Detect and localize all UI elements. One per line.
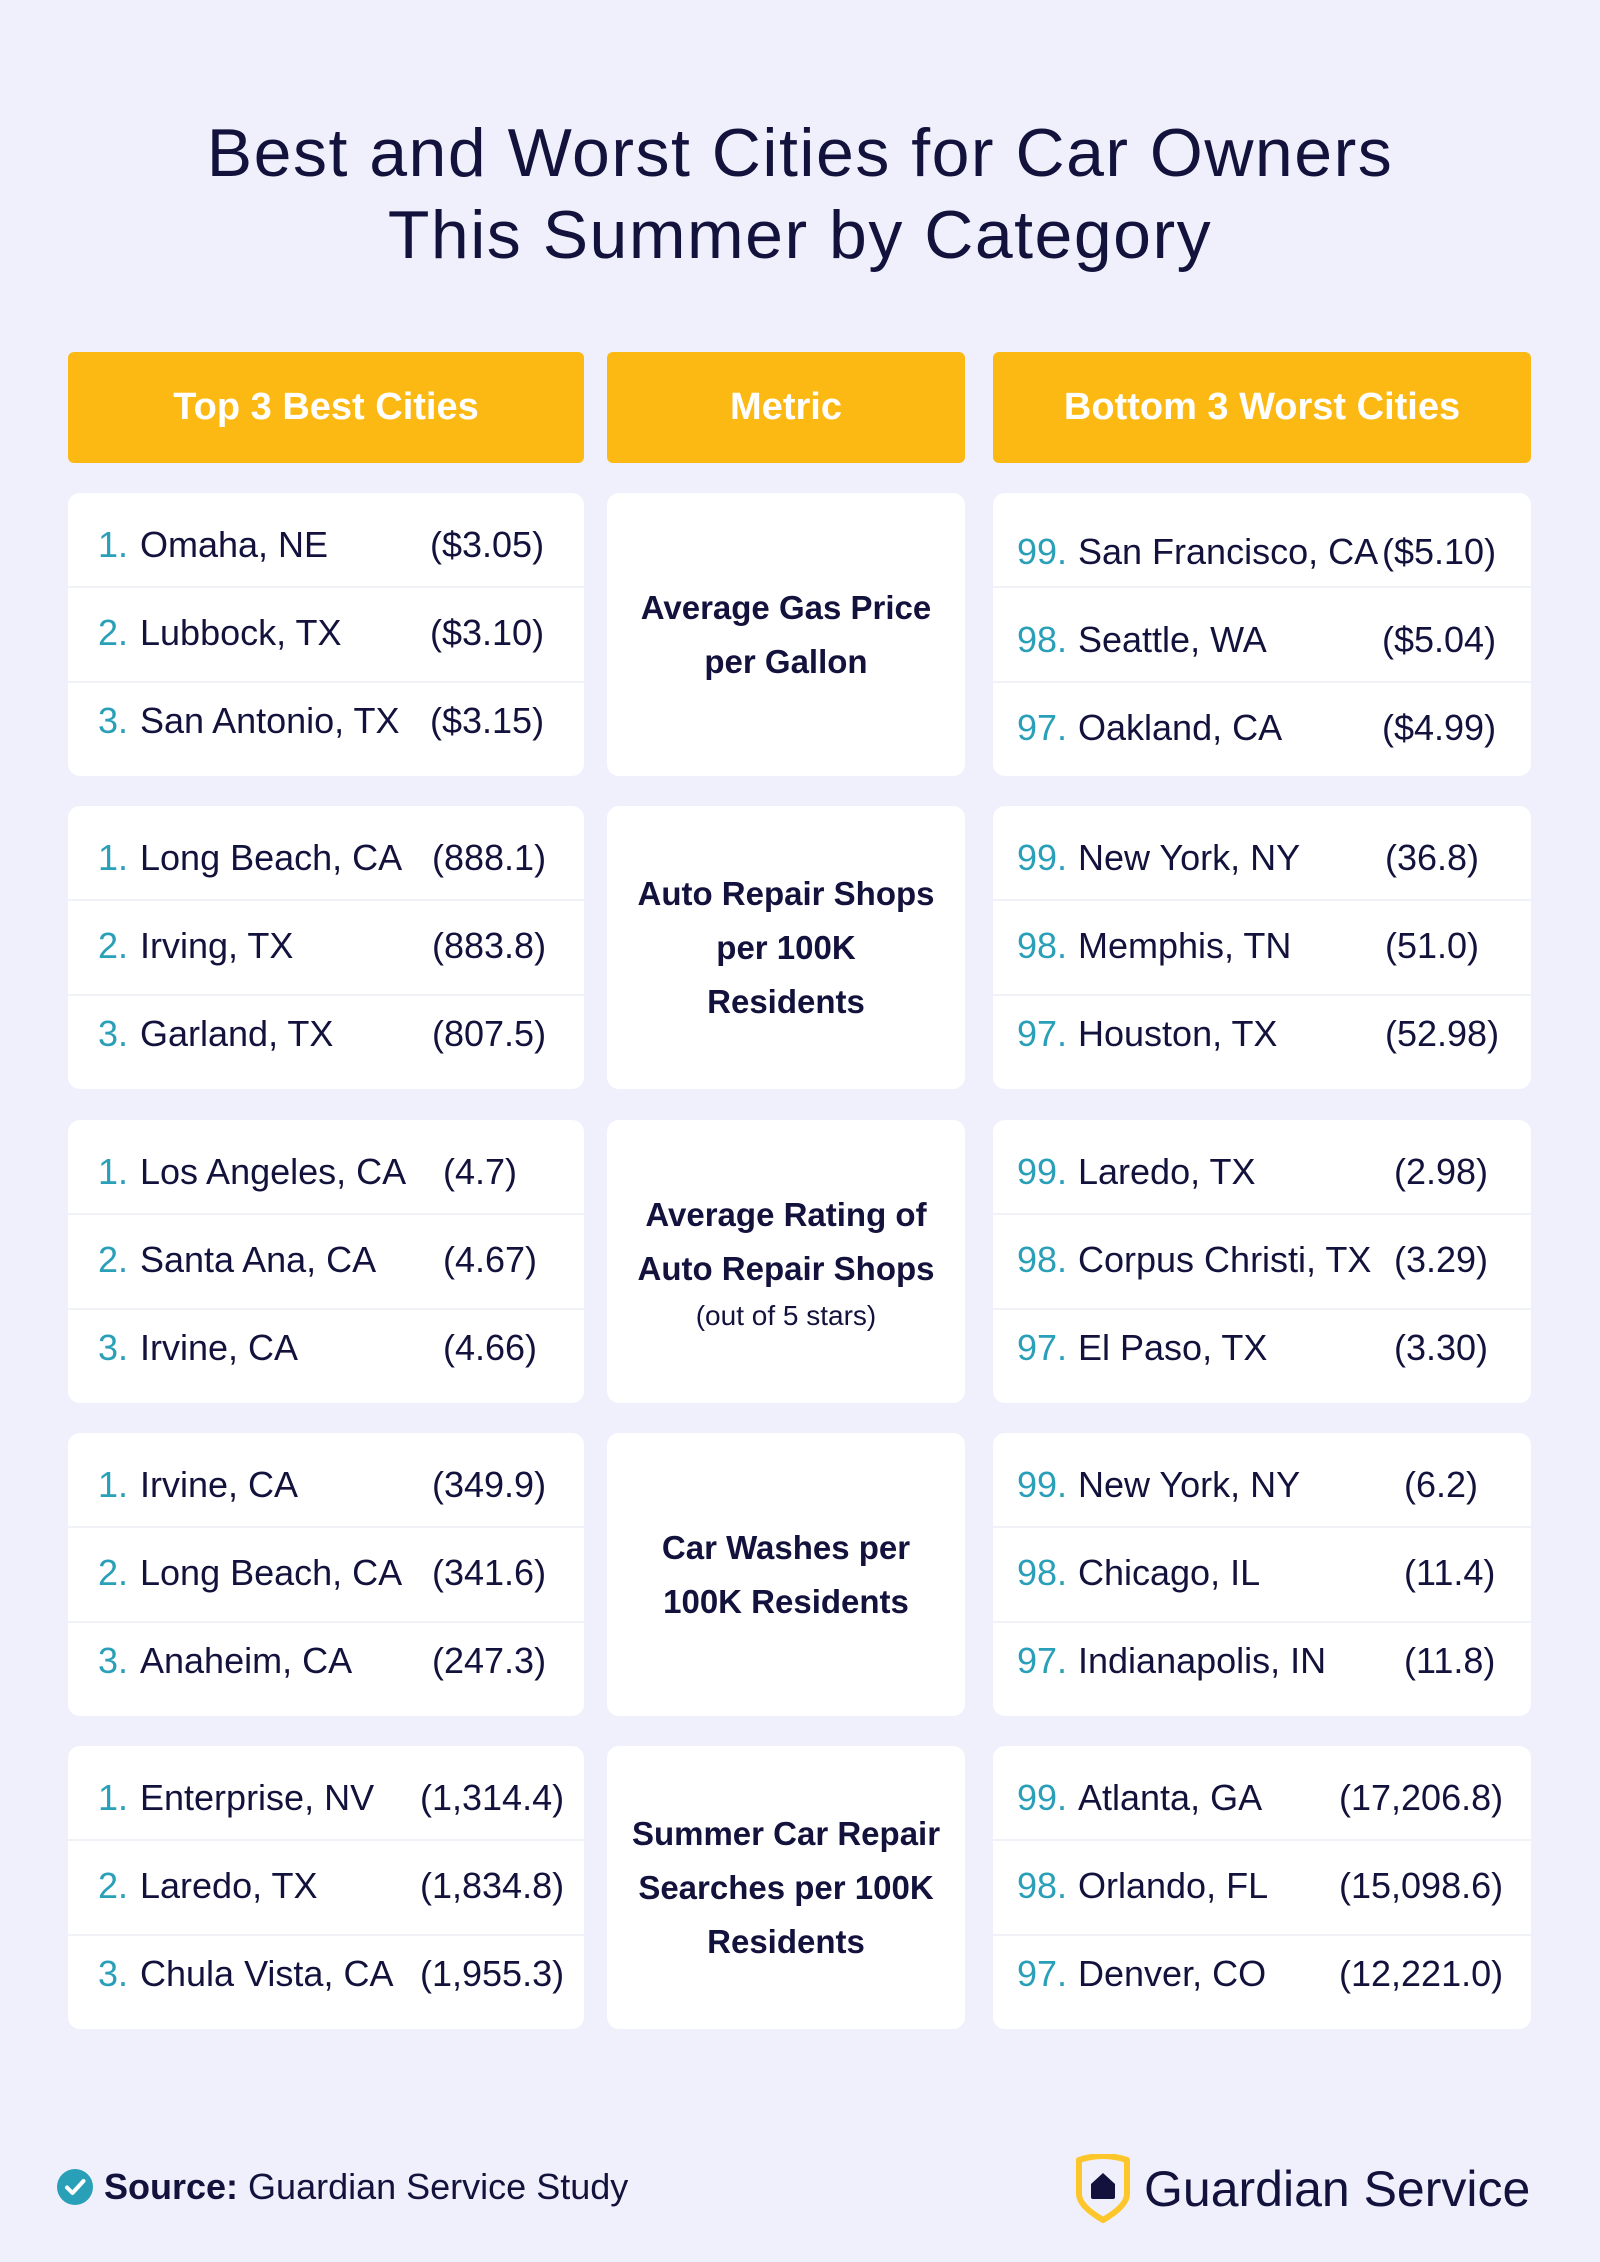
panel: rating best xyxy=(68,1120,584,1403)
panel: repair shops best: (888.1) xyxy=(432,837,546,878)
panel: gas best: Omaha, NE xyxy=(140,524,328,565)
panel: repair shops metric: Residents xyxy=(707,982,865,1020)
panel: repair shops best xyxy=(68,806,584,1089)
panel: repair shops worst: Houston, TX xyxy=(1078,1013,1277,1054)
panel: rating best: Santa Ana, CA xyxy=(140,1239,376,1280)
panel: gas best: ($3.05) xyxy=(430,524,544,565)
header: metric: Metric xyxy=(730,386,842,428)
panel: repair shops worst: New York, NY xyxy=(1078,837,1300,878)
panel: rating metric xyxy=(607,1120,965,1403)
panel: gas best: 2. xyxy=(98,612,128,653)
panel: repair shops worst: (51.0) xyxy=(1385,925,1479,966)
panel: car washes best: Irvine, CA xyxy=(140,1464,298,1505)
panel: car washes best: (247.3) xyxy=(432,1640,546,1681)
panel: car washes worst: Chicago, IL xyxy=(1078,1552,1260,1593)
panel: searches worst: Orlando, FL xyxy=(1078,1865,1268,1906)
panel: rating best: (4.67) xyxy=(443,1239,537,1280)
panel: gas worst: Seattle, WA xyxy=(1078,619,1267,660)
icon: check badge xyxy=(57,2169,93,2205)
panel: car washes worst: (11.8) xyxy=(1404,1640,1495,1681)
panel: rating worst: 99. xyxy=(1017,1151,1067,1192)
panel: gas best: ($3.10) xyxy=(430,612,544,653)
panel: rating metric: Average Rating of xyxy=(645,1196,927,1232)
panel: rating metric: (out of 5 stars) xyxy=(696,1300,876,1330)
panel: rating best: 3. xyxy=(98,1327,128,1368)
panel: searches best: Laredo, TX xyxy=(140,1865,317,1906)
panel: gas worst: 99. xyxy=(1017,531,1067,572)
panel: car washes metric: 100K Residents xyxy=(663,1582,909,1620)
panel: rating best: 1. xyxy=(98,1151,128,1192)
panel: gas worst: San Francisco, CA xyxy=(1078,531,1378,572)
panel: car washes worst: (6.2) xyxy=(1404,1464,1478,1505)
panel: repair shops worst xyxy=(993,806,1531,1089)
panel: rating worst: (3.30) xyxy=(1394,1327,1488,1368)
panel: searches best: (1,834.8) xyxy=(420,1865,564,1906)
panel: repair shops worst: 99. xyxy=(1017,837,1067,878)
panel: searches worst: (15,098.6) xyxy=(1339,1865,1503,1906)
panel: repair shops best: 1. xyxy=(98,837,128,878)
panel: gas worst: 98. xyxy=(1017,619,1067,660)
logo xyxy=(1076,2154,1530,2223)
panel: rating worst: Corpus Christi, TX xyxy=(1078,1239,1371,1280)
panel: car washes best: (341.6) xyxy=(432,1552,546,1593)
logo: Guardian Service xyxy=(1144,2161,1530,2217)
panel: car washes best: (349.9) xyxy=(432,1464,546,1505)
panel: searches worst: (12,221.0) xyxy=(1339,1953,1503,1994)
panel: rating best: (4.66) xyxy=(443,1327,537,1368)
panel: car washes best: 3. xyxy=(98,1640,128,1681)
title xyxy=(207,115,1393,273)
panel: car washes best: Long Beach, CA xyxy=(140,1552,402,1593)
panel: searches worst: Denver, CO xyxy=(1078,1953,1266,1994)
panel: searches worst: Atlanta, GA xyxy=(1078,1777,1262,1818)
panel: gas best: 1. xyxy=(98,524,128,565)
panel: car washes worst xyxy=(993,1433,1531,1716)
panel: rating worst: El Paso, TX xyxy=(1078,1327,1267,1368)
panel: repair shops metric: Auto Repair Shops xyxy=(637,874,935,912)
panel: repair shops best: 3. xyxy=(98,1013,128,1054)
panel: repair shops metric xyxy=(607,806,965,1089)
panel: repair shops worst: (52.98) xyxy=(1385,1013,1499,1054)
panel: rating worst: 98. xyxy=(1017,1239,1067,1280)
header: worst: Bottom 3 Worst Cities xyxy=(1064,386,1460,428)
panel: car washes worst: 98. xyxy=(1017,1552,1067,1593)
panel: gas metric: per Gallon xyxy=(704,642,868,680)
panel: car washes worst: 97. xyxy=(1017,1640,1067,1681)
panel: gas worst: ($5.04) xyxy=(1382,619,1496,660)
title: Best and Worst Cities for Car Owners xyxy=(207,115,1393,191)
icon: shield xyxy=(1076,2154,1130,2223)
panel: searches metric xyxy=(607,1746,965,2029)
panel: searches worst: 99. xyxy=(1017,1777,1067,1818)
panel: searches best: (1,955.3) xyxy=(420,1953,564,1994)
header: metric xyxy=(607,352,965,463)
panel: searches best: 2. xyxy=(98,1865,128,1906)
panel: searches best xyxy=(68,1746,584,2029)
panel: repair shops worst: Memphis, TN xyxy=(1078,925,1291,966)
panel: car washes worst: Indianapolis, IN xyxy=(1078,1640,1326,1681)
panel: repair shops best: (883.8) xyxy=(432,925,546,966)
panel: gas worst: Oakland, CA xyxy=(1078,707,1282,748)
panel: gas worst: 97. xyxy=(1017,707,1067,748)
panel: searches best: Chula Vista, CA xyxy=(140,1953,393,1994)
panel: car washes best: Anaheim, CA xyxy=(140,1640,352,1681)
panel: rating best: Irvine, CA xyxy=(140,1327,298,1368)
panel: repair shops best: (807.5) xyxy=(432,1013,546,1054)
panel: rating best: (4.7) xyxy=(443,1151,517,1192)
panel: car washes worst: (11.4) xyxy=(1404,1552,1495,1593)
panel: searches best: 3. xyxy=(98,1953,128,1994)
panel: rating worst: (3.29) xyxy=(1394,1239,1488,1280)
panel: gas metric xyxy=(607,493,965,776)
panel: gas best: San Antonio, TX xyxy=(140,700,400,741)
panel: gas best: 3. xyxy=(98,700,128,741)
panel: car washes best xyxy=(68,1433,584,1716)
panel: rating worst: Laredo, TX xyxy=(1078,1151,1255,1192)
panel: gas worst: ($4.99) xyxy=(1382,707,1496,748)
panel: gas worst xyxy=(993,493,1531,776)
panel: searches metric: Residents xyxy=(707,1922,865,1960)
panel: repair shops worst: 97. xyxy=(1017,1013,1067,1054)
title: This Summer by Category xyxy=(388,197,1212,273)
panel: searches best: (1,314.4) xyxy=(420,1777,564,1818)
header: worst xyxy=(993,352,1531,463)
panel: rating metric: Auto Repair Shops xyxy=(637,1250,935,1286)
panel: searches worst xyxy=(993,1746,1531,2029)
panel: repair shops worst: (36.8) xyxy=(1385,837,1479,878)
header: best xyxy=(68,352,584,463)
header: best: Top 3 Best Cities xyxy=(173,386,479,428)
panel: searches metric: Searches per 100K xyxy=(638,1868,934,1906)
panel: repair shops best: Irving, TX xyxy=(140,925,293,966)
panel: rating worst xyxy=(993,1120,1531,1403)
panel: searches best: Enterprise, NV xyxy=(140,1777,374,1818)
panel: repair shops worst: 98. xyxy=(1017,925,1067,966)
panel: repair shops best: 2. xyxy=(98,925,128,966)
panel: car washes metric xyxy=(607,1433,965,1716)
panel: repair shops best: Long Beach, CA xyxy=(140,837,402,878)
panel: rating best: 2. xyxy=(98,1239,128,1280)
panel: car washes best: 2. xyxy=(98,1552,128,1593)
panel: car washes worst: 99. xyxy=(1017,1464,1067,1505)
panel: rating worst: 97. xyxy=(1017,1327,1067,1368)
panel: gas best: Lubbock, TX xyxy=(140,612,341,653)
panel: repair shops metric: per 100K xyxy=(716,928,856,966)
panel: searches worst: (17,206.8) xyxy=(1339,1777,1503,1818)
panel: car washes worst: New York, NY xyxy=(1078,1464,1300,1505)
panel: car washes metric: Car Washes per xyxy=(662,1528,910,1566)
panel: rating best: Los Angeles, CA xyxy=(140,1151,406,1192)
panel: car washes best: 1. xyxy=(98,1464,128,1505)
panel: searches best: 1. xyxy=(98,1777,128,1818)
panel: rating worst: (2.98) xyxy=(1394,1151,1488,1192)
panel: repair shops best: Garland, TX xyxy=(140,1013,333,1054)
panel: gas best: ($3.15) xyxy=(430,700,544,741)
panel: searches metric: Summer Car Repair xyxy=(632,1814,940,1852)
panel: gas metric: Average Gas Price xyxy=(641,588,931,626)
source footer: Source: Guardian Service Study xyxy=(104,2166,628,2207)
panel: gas best xyxy=(68,493,584,776)
panel: gas worst: ($5.10) xyxy=(1382,531,1496,572)
panel: searches worst: 98. xyxy=(1017,1865,1067,1906)
panel: searches worst: 97. xyxy=(1017,1953,1067,1994)
